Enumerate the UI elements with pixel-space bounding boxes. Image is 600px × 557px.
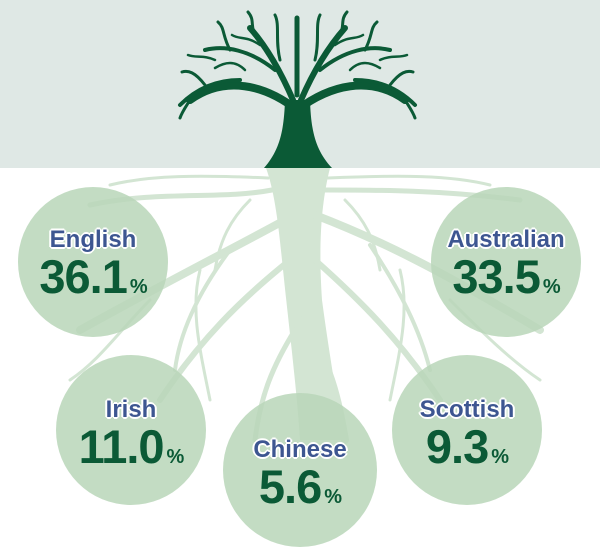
circle: Australian — [431, 187, 581, 337]
circle: Chinese — [223, 393, 377, 547]
label: Scottish 9.3% — [418, 396, 515, 473]
label: Chinese 5.6%: 5.6% — [259, 460, 341, 513]
label: Australian 33.5%: 33.5% — [452, 250, 560, 303]
label: English 36.1% — [39, 226, 148, 303]
circle: Irish — [56, 355, 206, 505]
label: Irish 11.0%: 11.0% — [79, 420, 183, 473]
label: Scottish 9.3%: 9.3% — [426, 420, 508, 473]
label: Australian 33.5% — [446, 226, 566, 303]
label: Chinese 5.6%: Chinese — [253, 436, 347, 463]
label: English 36.1%: 36.1% — [39, 250, 147, 303]
tree — [178, 10, 418, 168]
label: English 36.1%: English — [50, 226, 136, 253]
label: Irish 11.0%: Irish — [106, 396, 156, 423]
circle: English — [18, 187, 168, 337]
label: Chinese 5.6% — [252, 436, 348, 513]
label: Australian 33.5%: Australian — [447, 226, 565, 253]
label: Irish 11.0% — [79, 396, 184, 473]
circle: Scottish — [392, 355, 542, 505]
label: Scottish 9.3%: Scottish — [420, 396, 514, 423]
background band — [0, 0, 600, 168]
